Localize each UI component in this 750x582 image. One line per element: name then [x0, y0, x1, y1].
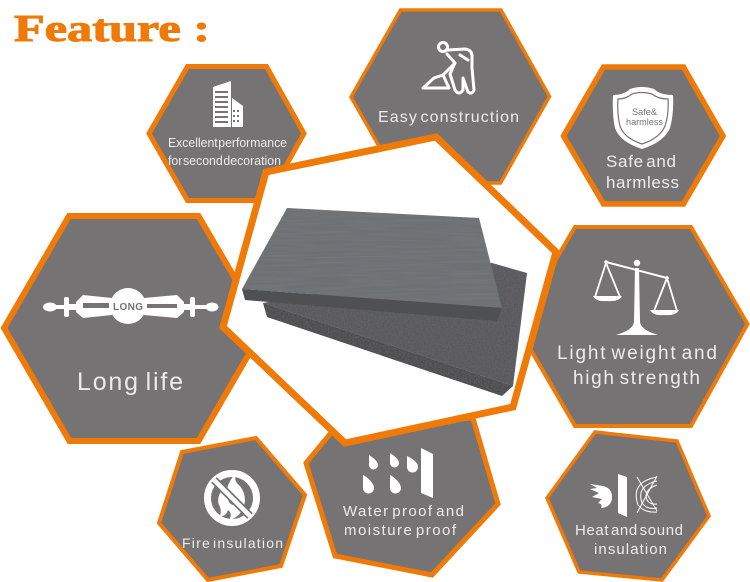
- label: water proof and moisture proof: moisture proof: [344, 522, 457, 539]
- label: safe and harmless: Safe and: [606, 152, 676, 171]
- icon: worker: [423, 42, 474, 93]
- title: Feature :: [14, 8, 210, 50]
- label: excellent performance: Excellent performance: [168, 135, 287, 150]
- icon: no fire: [208, 473, 256, 522]
- icon: long ornament: [43, 288, 218, 324]
- panel: excellent performance: [149, 66, 304, 200]
- label: long life: Long life: [77, 368, 183, 396]
- label: safe and harmless: harmless: [606, 173, 679, 192]
- panel: safe and harmless: [564, 67, 723, 204]
- panel: fire insulation: [159, 438, 305, 580]
- label: fire insulation: Fire insulation: [182, 535, 283, 551]
- icon: shield: [613, 87, 673, 149]
- label: light weight and high strength: high strength: [573, 368, 700, 389]
- label: light weight and high strength: Light weight and: [557, 343, 717, 364]
- icon: shield: Safe&: [632, 107, 657, 117]
- label: easy construction: Easy construction: [378, 109, 519, 126]
- label: water proof and moisture proof: [343, 503, 464, 539]
- label: excellent performance: [168, 135, 287, 168]
- panel: water proof and moisture proof: [306, 418, 498, 575]
- photo: upper board: [242, 208, 502, 321]
- icon: building: [213, 81, 243, 127]
- icon: heat and sound: [590, 474, 657, 517]
- panel: easy construction: [351, 10, 550, 183]
- icon: water drops and panel: [363, 448, 433, 498]
- label: heat and sound insulation: insulation: [594, 541, 667, 558]
- panel: central product photo: [223, 137, 556, 443]
- label: water proof and moisture proof: Water proof and: [343, 503, 464, 520]
- icon: long ornament: LONG: [113, 302, 143, 313]
- label: heat and sound insulation: Heat and sound: [575, 522, 683, 539]
- panel: long life: [4, 216, 264, 441]
- panel: light weight and high strength: [517, 227, 748, 426]
- label: heat and sound insulation: [575, 522, 683, 558]
- icon: balance scale: [593, 260, 679, 335]
- label: light weight and high strength: [557, 343, 717, 389]
- photo: lower board: [263, 263, 527, 396]
- panel: heat and sound insulation: [547, 432, 709, 580]
- icon: shield: harmless: [626, 117, 664, 127]
- label: excellent performance: for second decoration: [168, 153, 281, 168]
- label: safe and harmless: [606, 152, 679, 192]
